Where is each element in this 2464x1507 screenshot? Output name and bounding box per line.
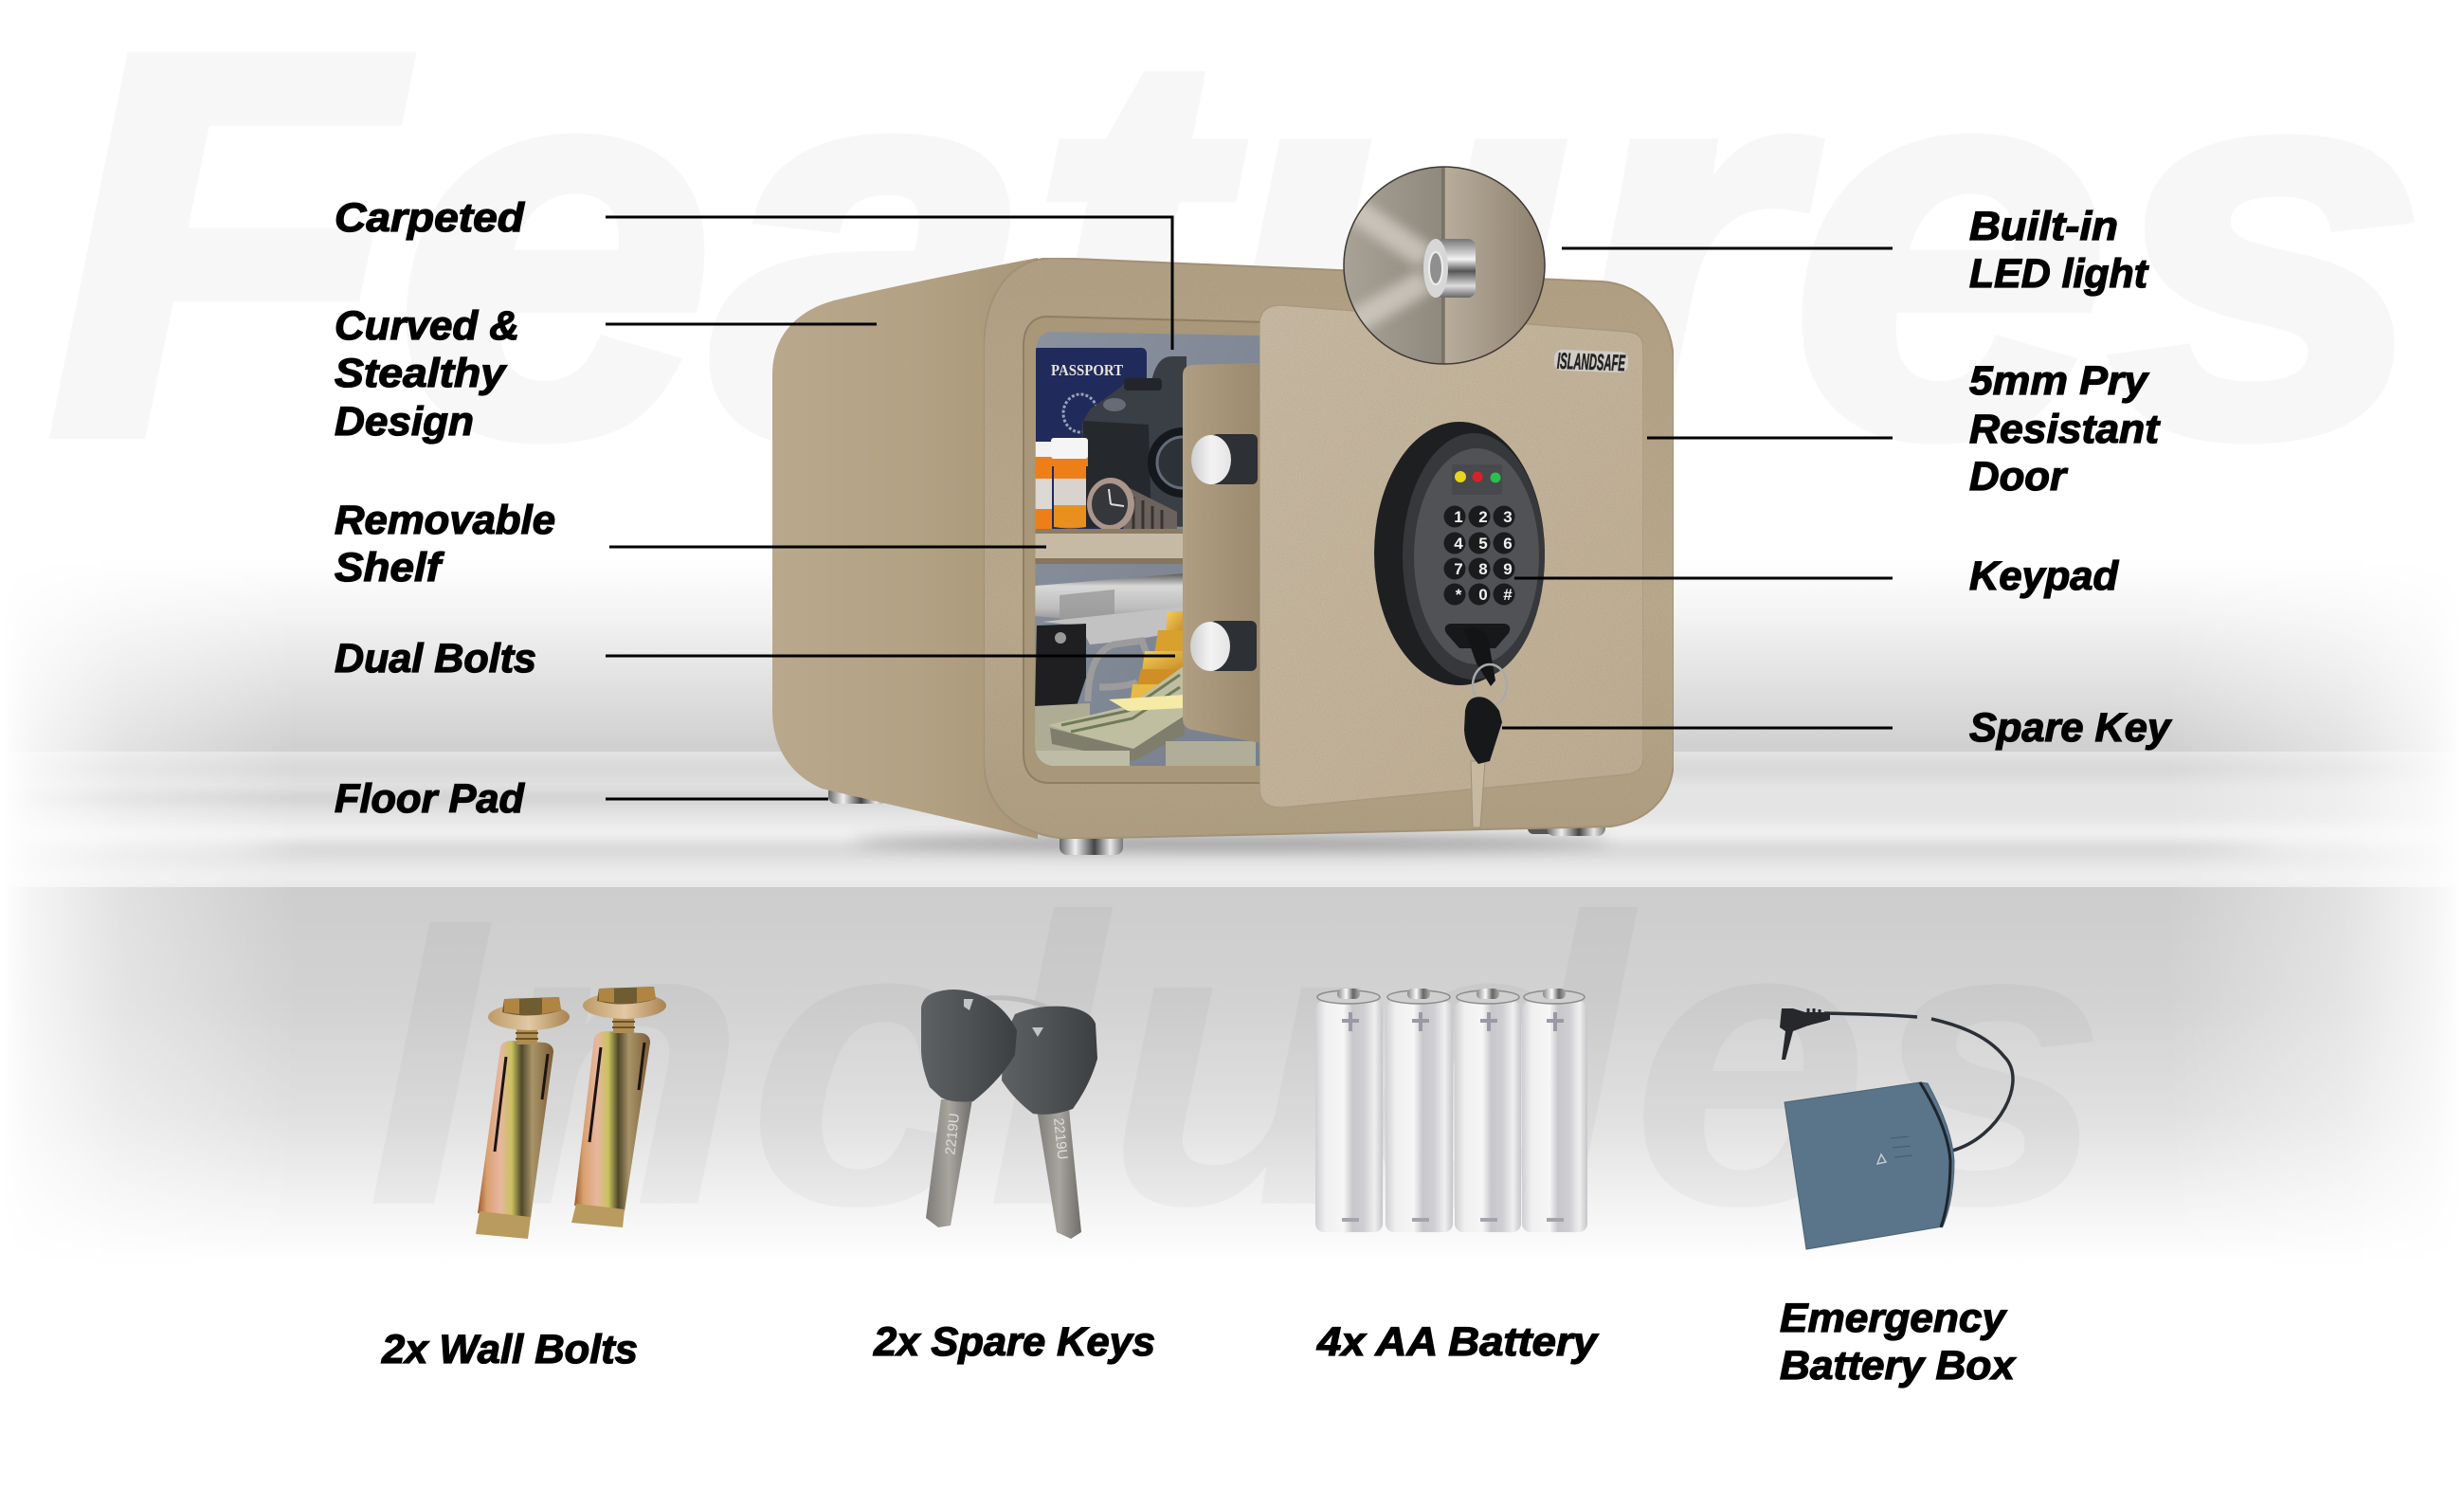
battery 1 <box>1315 989 1383 1232</box>
number buttons: 5 <box>1478 535 1488 553</box>
background word: Includes: Includes <box>365 833 2109 1291</box>
number buttons: * <box>1456 586 1462 604</box>
passport <box>1036 348 1147 531</box>
key slot <box>1445 624 1510 648</box>
wall bolt left <box>476 997 570 1239</box>
door panel <box>1259 305 1643 808</box>
medicine bottles <box>1033 438 1088 529</box>
included item: emergency battery box <box>1780 1008 2013 1249</box>
number buttons: 8 <box>1478 560 1488 578</box>
spare key in lock <box>1464 627 1507 827</box>
caption: emergency battery box: Battery Box <box>1780 1343 2017 1389</box>
safe product illustration: ISLANDSAFE <box>1556 349 1626 376</box>
brand plate <box>1554 349 1628 376</box>
dual bolts <box>1190 434 1258 671</box>
label: dual bolts: Dual Bolts <box>335 636 536 681</box>
gold bars <box>1131 611 1183 699</box>
safe side panel <box>772 258 1038 839</box>
feature callout lines <box>606 217 1893 799</box>
label: spare key: Spare Key <box>1969 705 2172 751</box>
caption: spare keys: 2x Spare Keys <box>873 1319 1155 1365</box>
label: removable shelf <box>335 498 555 590</box>
passport: PASSPORT <box>1051 361 1124 379</box>
removable shelf <box>1033 529 1194 564</box>
label: curved and stealthy design: Design <box>335 399 474 445</box>
handgun <box>1035 573 1185 706</box>
included item: wall bolts <box>476 987 666 1239</box>
key ring <box>968 992 1060 1032</box>
wall bolt right <box>571 987 666 1227</box>
key one: 2219U <box>942 1113 963 1155</box>
caption: emergency battery box: Emergency <box>1780 1296 2007 1341</box>
label: 5mm pry resistant door: Resistant <box>1969 407 2161 452</box>
keypad outer housing <box>1374 422 1545 685</box>
label: curved and stealthy design <box>335 303 519 445</box>
label: 5mm pry resistant door: 5mm Pry <box>1969 358 2149 404</box>
label: curved and stealthy design: Curved & <box>335 303 519 349</box>
label: built-in LED light: Built-in <box>1969 204 2118 249</box>
status LEDs <box>1452 464 1502 495</box>
number buttons: # <box>1503 586 1513 604</box>
caption: emergency battery box <box>1780 1296 2017 1389</box>
included item: spare keys <box>921 990 1097 1239</box>
labels: left features <box>335 195 555 822</box>
number buttons: 2 <box>1478 508 1488 526</box>
label: floor pad: Floor Pad <box>335 776 525 822</box>
labels: right features <box>1969 204 2172 751</box>
wrist watch <box>1087 478 1177 531</box>
number buttons <box>1444 506 1514 605</box>
battery 3 <box>1455 989 1521 1232</box>
background: gray studio gradient <box>25 599 2439 1225</box>
LED light inset circle <box>1344 167 1545 364</box>
number buttons: 7 <box>1454 560 1463 578</box>
key two: 2219U <box>1050 1117 1071 1160</box>
door inner edge <box>1183 363 1260 743</box>
interior contents <box>1033 330 1260 768</box>
key two <box>1002 1007 1097 1239</box>
number buttons: 0 <box>1478 586 1488 604</box>
caption: AA battery: 4x AA Battery <box>1316 1319 1599 1365</box>
keypad face <box>1414 448 1539 664</box>
box body <box>1785 1082 1954 1249</box>
label: removable shelf: Removable <box>335 498 555 543</box>
caption: wall bolts: 2x Wall Bolts <box>381 1327 638 1372</box>
battery 4 <box>1522 989 1587 1232</box>
number buttons: 4 <box>1454 535 1463 553</box>
number buttons: 3 <box>1503 508 1513 526</box>
LED bulb <box>1423 239 1476 298</box>
interior groove <box>1024 317 1270 783</box>
floor shadow <box>853 833 1611 850</box>
labels: included items <box>381 1296 2017 1389</box>
key one <box>921 990 1017 1227</box>
number buttons: 9 <box>1503 560 1513 578</box>
carpet lining <box>1033 330 1260 768</box>
keypad <box>1374 422 1545 685</box>
battery 2 <box>1386 989 1453 1232</box>
label: curved and stealthy design: Stealthy <box>335 351 507 396</box>
safe front frame <box>984 258 1674 839</box>
label: removable shelf: Shelf <box>335 545 444 590</box>
label: keypad: Keypad <box>1969 554 2119 599</box>
audio jack <box>1780 1008 1830 1060</box>
label: 5mm pry resistant door <box>1969 358 2161 499</box>
safe product illustration <box>772 167 1674 855</box>
label: built-in LED light <box>1969 204 2149 297</box>
label: carpeted: Carpeted <box>335 195 525 241</box>
number buttons: 6 <box>1503 535 1513 553</box>
cash stack <box>1035 665 1256 768</box>
box cable <box>1931 1019 2013 1151</box>
label: built-in LED light: LED light <box>1969 251 2149 297</box>
camera <box>1082 356 1187 527</box>
feet <box>828 785 1605 855</box>
label: 5mm pry resistant door: Door <box>1969 454 2068 499</box>
included item: AA batteries <box>1315 989 1587 1232</box>
number buttons: 1 <box>1454 508 1463 526</box>
